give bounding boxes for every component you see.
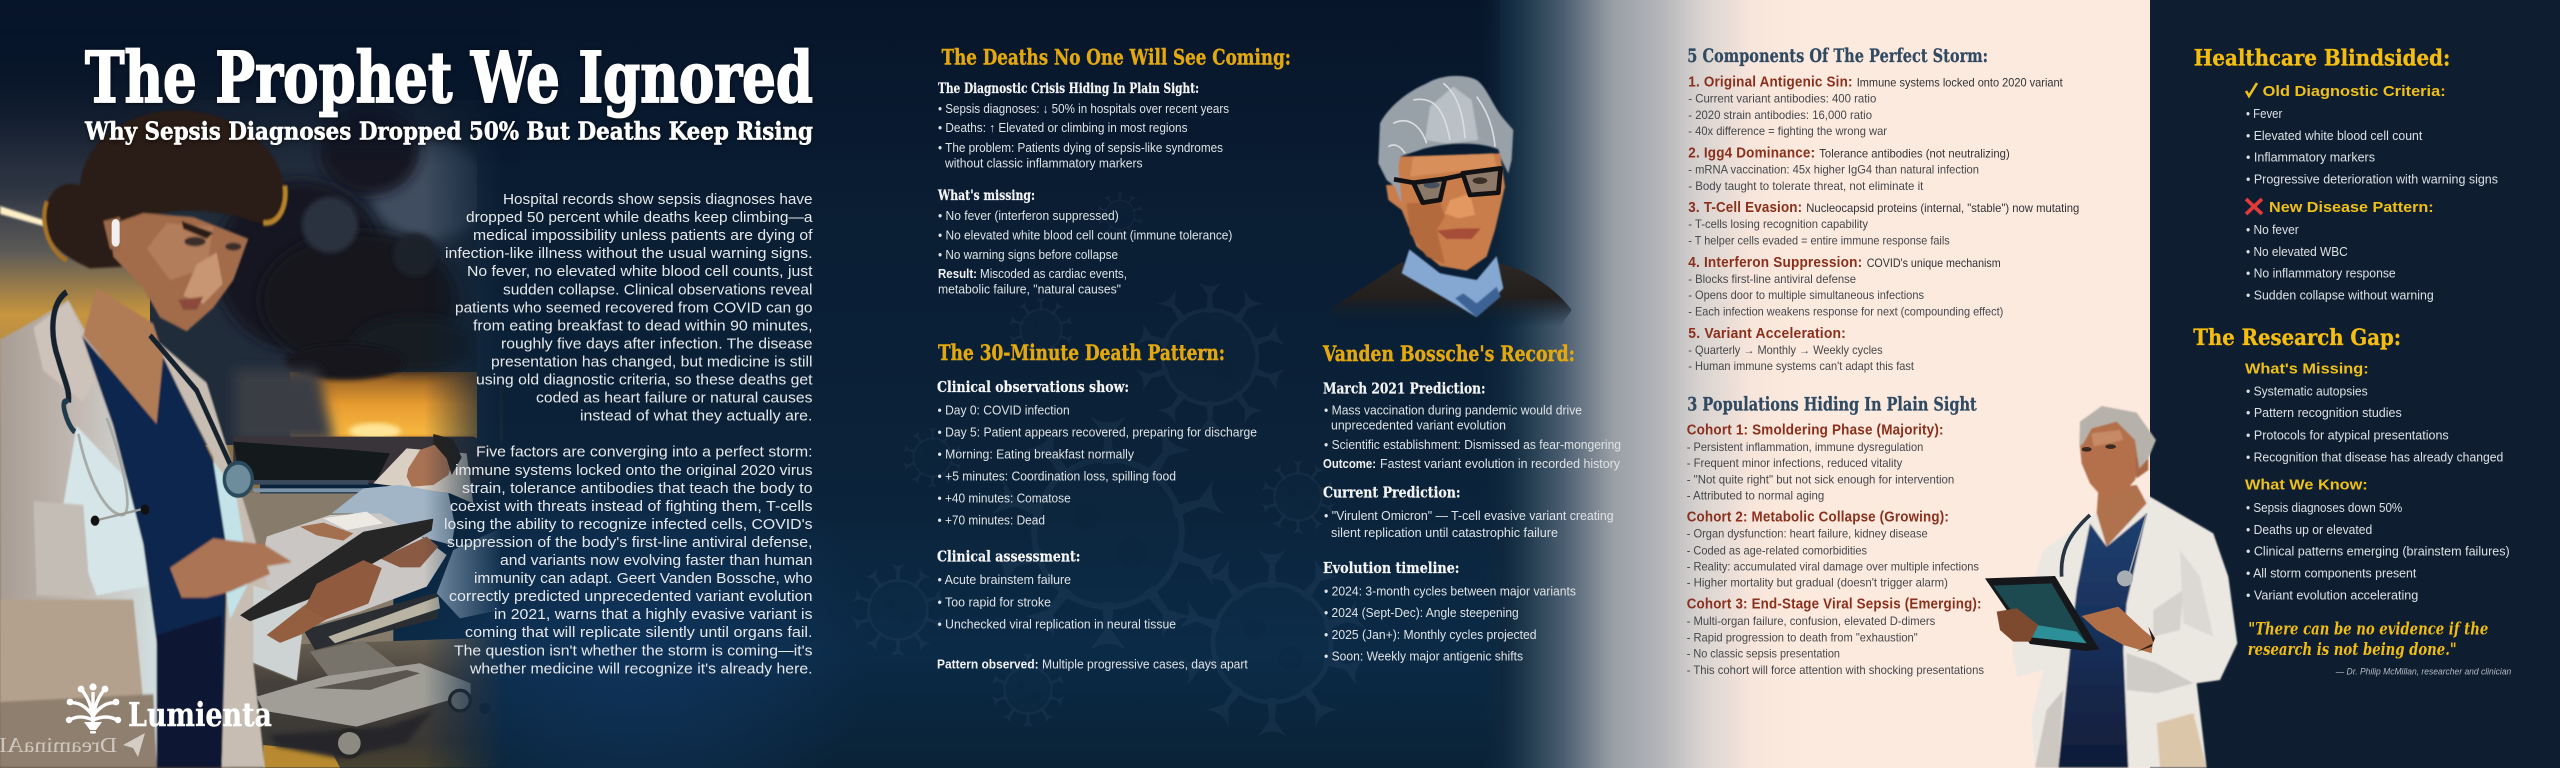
illustration: dark overlay at the top — [0, 0, 520, 165]
panel: the deaths no one will see coming: Result: — [938, 267, 977, 281]
panel: 5 components of the perfect storm: 1. Original Antigenic Sin: — [1688, 75, 1853, 91]
intro paragraph one: dropped 50 percent while deaths keep climbing—a — [466, 209, 813, 226]
panel: 3 populations hiding in plain sight: - This cohort will force attention with shocking presentations — [1687, 664, 1984, 677]
panel: Vanden Bossche's record: • "Virulent Omicron" — T-cell evasive variant creating — [1324, 509, 1614, 523]
panel: the 30-minute death pattern: • Day 0: COVID infection — [938, 403, 1070, 417]
intro paragraph two: and variants now evolving faster than human — [500, 552, 812, 569]
panel: the research gap: • Recognition that disease has already changed — [2246, 450, 2503, 464]
subtitle: Why Sepsis Diagnoses Dropped 50% But Deaths Keep Rising — [84, 117, 813, 146]
panel: 5 components of the perfect storm: - mRNA vaccination: 45x higher IgG4 than natural infection — [1688, 163, 1979, 176]
intro paragraph one: sudden collapse. Clinical observations reveal — [503, 281, 812, 298]
callout: quote: "There can be no evidence if the — [2248, 620, 2488, 639]
panel: the 30-minute death pattern: • Acute brainstem failure — [938, 573, 1071, 587]
panel: 5 components of the perfect storm — [1687, 45, 2079, 373]
panel: Vanden Bossche's record — [1322, 341, 1621, 664]
panel: the deaths no one will see coming: The Diagnostic Crisis Hiding In Plain Sight: — [938, 81, 1199, 97]
panel: the research gap: The Research Gap: — [2193, 325, 2401, 351]
panel: 5 components of the perfect storm: - 40x difference = fighting the wrong war — [1688, 125, 1887, 138]
watermark: mirrored DreaminaAI: DreaminaAI — [0, 733, 117, 757]
panel: the deaths no one will see coming — [937, 45, 1291, 296]
intro paragraph one: roughly five days after infection. The disease — [501, 335, 812, 352]
panel: the 30-minute death pattern — [937, 340, 1257, 672]
intro paragraph one: patients who seemed recovered from COVID can go — [455, 299, 812, 316]
panel: 5 components of the perfect storm: Nucleocapsid proteins (internal, "stable") now mutating — [1806, 201, 2079, 215]
panel: 3 populations hiding in plain sight: - Multi-organ failure, confusion, elevated D-dimers — [1687, 615, 1935, 628]
intro paragraph two: whether medicine will recognize it's already here. — [469, 660, 812, 677]
panel: the 30-minute death pattern: • Morning: Eating breakfast normally — [938, 447, 1135, 461]
panel: 5 components of the perfect storm: - Human immune systems can't adapt this fast — [1688, 360, 1915, 373]
panel: Vanden Bossche's record: • Soon: Weekly major antigenic shifts — [1324, 650, 1523, 664]
panel: the research gap: • Protocols for atypical presentations — [2246, 428, 2449, 442]
intro paragraph two — [444, 444, 812, 677]
panel: the deaths no one will see coming: metabolic failure, "natural causes" — [938, 282, 1121, 296]
decoration: virus particles — [851, 192, 1365, 736]
panel: 3 populations hiding in plain sight: 3 Populations Hiding In Plain Sight — [1687, 393, 1977, 415]
panel: 5 components of the perfect storm: - Blocks first-line antiviral defense — [1688, 273, 1856, 286]
panel: 5 components of the perfect storm: 5 Components Of The Perfect Storm: — [1687, 45, 1988, 67]
panel: healthcare blindsided: • Progressive deterioration with warning signs — [2246, 173, 2498, 187]
panel: Vanden Bossche's record: • 2024: 3-month cycles between major variants — [1324, 584, 1576, 598]
illustration: bed, patient and room lower area — [230, 434, 520, 768]
intro paragraph two: coexist with threats instead of fighting them, T-cells — [450, 498, 812, 515]
panel: 3 populations hiding in plain sight: Cohort 1: Smoldering Phase (Majority): — [1687, 422, 1944, 438]
panel: the research gap: • Pattern recognition studies — [2246, 406, 2402, 420]
intro paragraph one: presentation has changed, but medicine is still — [491, 354, 812, 370]
panel: Vanden Bossche's record: • 2024 (Sept-Dec): Angle steepening — [1324, 606, 1519, 620]
panel: the deaths no one will see coming: • Sepsis diagnoses: ↓ 50% in hospitals over recent years — [938, 102, 1229, 116]
logo: Lumienta: Lumienta — [128, 695, 272, 734]
intro paragraph two: immunity can adapt. Geert Vanden Bossche, who — [474, 570, 812, 587]
panel: 3 populations hiding in plain sight: - No classic sepsis presentation — [1687, 648, 1840, 661]
panel: the 30-minute death pattern: • +40 minutes: Comatose — [938, 491, 1071, 505]
panel: the deaths no one will see coming: • No elevated white blood cell count (immune tolerance) — [938, 228, 1232, 242]
panel: the 30-minute death pattern: Pattern observed: — [937, 658, 1039, 672]
panel: 3 populations hiding in plain sight: - Organ dysfunction: heart failure, kidney disease — [1687, 528, 1928, 541]
intro paragraph one: infection-like illness without the usual warning signs. — [445, 245, 812, 262]
panel: the research gap: What We Know: — [2245, 477, 2368, 494]
panel: 5 components of the perfect storm: - Each infection weakens response for next (compounding effect) — [1688, 305, 2003, 318]
panel: cover illustration room — [0, 60, 520, 768]
panel: the research gap: What's Missing: — [2245, 361, 2369, 378]
intro paragraph two: correctly predicted unprecedented variant evolution — [449, 588, 812, 605]
panel: healthcare blindsided: • No elevated WBC — [2246, 245, 2348, 259]
panel: Vanden Bossche's record: • Scientific establishment: Dismissed as fear-mongering — [1324, 438, 1621, 452]
panel: the deaths no one will see coming: • Deaths: ↑ Elevated or climbing in most regions — [938, 121, 1188, 135]
panel: healthcare blindsided — [2194, 46, 2498, 303]
panel: the deaths no one will see coming: • No fever (interferon suppressed) — [938, 209, 1119, 223]
panel: the 30-minute death pattern: Clinical assessment: — [937, 549, 1080, 566]
illustration: hospital wall — [0, 60, 260, 768]
panel: 3 populations hiding in plain sight: - Rapid progression to death from "exhaustion" — [1687, 632, 1918, 644]
panel: the 30-minute death pattern: The 30-Minute Death Pattern: — [938, 340, 1225, 365]
panel: healthcare blindsided: • Fever — [2246, 107, 2282, 121]
intro paragraph one: coded as heart failure or natural causes — [536, 390, 812, 407]
panel: 5 components of the perfect storm: 5. Variant Acceleration: — [1688, 326, 1846, 342]
panel: Vanden Bossche's record: • Mass vaccination during pandemic would drive — [1324, 403, 1582, 417]
panel: the deaths no one will see coming: • No warning signs before collapse — [938, 248, 1118, 262]
panel: 5 components of the perfect storm: - T-cells losing recognition capability — [1688, 218, 1868, 231]
intro paragraph one: instead of what they actually are. — [580, 408, 812, 425]
intro paragraph two: suppression of the body's first-line antiviral defense, — [447, 534, 812, 551]
panel: Vanden Bossche's record: Fastest variant evolution in recorded history — [1380, 457, 1621, 471]
panel: healthcare blindsided: New Disease Pattern: — [2269, 199, 2434, 216]
panel: healthcare blindsided: • No fever — [2246, 223, 2299, 237]
panel: 5 components of the perfect storm: 3. T-Cell Evasion: — [1688, 200, 1802, 216]
illustration: ceiling light — [0, 206, 50, 228]
panel: Vanden Bossche's record: Evolution timeline: — [1323, 560, 1460, 577]
panel: 5 components of the perfect storm: 2. Igg4 Dominance: — [1688, 146, 1815, 162]
panel: the deaths no one will see coming: What's missing: — [937, 188, 1035, 204]
panel: 3 populations hiding in plain sight: Cohort 2: Metabolic Collapse (Growing): — [1687, 510, 1949, 526]
illustration: storm sky through window — [150, 100, 505, 445]
panel: 5 components of the perfect storm: Immune systems locked onto 2020 variant — [1857, 76, 2063, 90]
panel: 3 populations hiding in plain sight: - Reality: accumulated viral damage over multiple infections — [1687, 560, 1979, 574]
panel: the research gap — [2193, 325, 2510, 602]
panel: Vanden Bossche's record: silent replication until catastrophic failure — [1331, 526, 1558, 540]
panel: the deaths no one will see coming: Miscoded as cardiac events, — [980, 267, 1127, 281]
intro paragraph one: medical impossibility unless patients are dying of — [473, 227, 813, 244]
panel: Vanden Bossche's record: Outcome: — [1323, 457, 1376, 471]
panel: the deaths no one will see coming: • The problem: Patients dying of sepsis-like syndromes — [938, 141, 1223, 155]
title: The Prophet We Ignored — [85, 36, 813, 119]
panel: healthcare blindsided: • Sudden collapse without warning — [2246, 289, 2434, 303]
illustration: portrait of Vanden Bossche — [1330, 76, 1572, 327]
callout: quote: — Dr. Philip McMillan, researcher and clinician — [2335, 666, 2511, 677]
panel: 5 components of the perfect storm: - 2020 strain antibodies: 16,000 ratio — [1688, 109, 1872, 122]
panel: 3 populations hiding in plain sight: - Coded as age-related comorbidities — [1687, 544, 1867, 557]
intro paragraph two: immune systems locked onto the original 2020 virus — [455, 462, 812, 479]
panel: the deaths no one will see coming: without classic inflammatory markers — [944, 156, 1143, 170]
illustration: doctor looking up with tablet — [1985, 406, 2237, 768]
panel: the 30-minute death pattern: • +5 minutes: Coordination loss, spilling food — [938, 469, 1176, 483]
intro paragraph two: coming that will replicate silently until organs fail. — [465, 624, 812, 641]
panel: 5 components of the perfect storm: Tolerance antibodies (not neutralizing) — [1819, 147, 2010, 161]
panel: Vanden Bossche's record: • 2025 (Jan+): Monthly cycles projected — [1324, 628, 1536, 642]
panel: the 30-minute death pattern: Multiple progressive cases, days apart — [1042, 658, 1248, 672]
illustration: doctor with tablet — [0, 110, 433, 767]
intro paragraph two: The question isn't whether the storm is coming—it's — [454, 642, 812, 659]
panel: right dark background — [2150, 0, 2560, 768]
intro paragraph one: using old diagnostic criteria, so these deaths get — [476, 372, 813, 388]
panel: 5 components of the perfect storm: - Quarterly → Monthly → Weekly cycles — [1688, 344, 1883, 357]
panel: 3 populations hiding in plain sight: - Persistent inflammation, immune dysregulation — [1687, 441, 1923, 454]
panel: 5 components of the perfect storm: 4. Interferon Suppression: — [1688, 255, 1862, 271]
panel: the 30-minute death pattern: • Day 5: Patient appears recovered, preparing for discharge — [938, 425, 1257, 439]
panel: the research gap: • Systematic autopsies — [2246, 385, 2368, 399]
panel: the deaths no one will see coming: The Deaths No One Will See Coming: — [942, 45, 1291, 70]
illustration: window frame post — [477, 166, 500, 444]
panel: the 30-minute death pattern: • +70 minutes: Dead — [938, 514, 1045, 528]
panel: the research gap: • Sepsis diagnoses down 50% — [2246, 501, 2402, 515]
panel: healthcare blindsided: • Inflammatory markers — [2246, 151, 2375, 165]
panel: Vanden Bossche's record: Current Prediction: — [1323, 484, 1460, 502]
panel: 5 components of the perfect storm: - T helper cells evaded = entire immune response fails — [1688, 234, 1950, 247]
panel: 3 populations hiding in plain sight: - Higher mortality but gradual (doesn't trigger alarm) — [1687, 577, 1948, 590]
panel: healthcare blindsided: Old Diagnostic Criteria: — [2263, 83, 2446, 100]
panel: healthcare blindsided: • No inflammatory response — [2246, 267, 2396, 281]
logo: Lumienta — [66, 683, 272, 734]
intro paragraph one — [445, 191, 813, 425]
panel: the research gap: • Variant evolution accelerating — [2246, 588, 2418, 602]
intro paragraph two: in 2021, warns that a highly evasive variant is — [494, 606, 812, 623]
panel: Vanden Bossche's record: March 2021 Prediction: — [1323, 381, 1486, 398]
panel: the research gap: • Deaths up or elevated — [2246, 523, 2372, 537]
panel: 3 populations hiding in plain sight: - "Not quite right" but not sick enough for intervention — [1687, 473, 1954, 486]
panel: the research gap: • Clinical patterns emerging (brainstem failures) — [2246, 544, 2510, 558]
panel: healthcare blindsided: • Elevated white blood cell count — [2246, 129, 2423, 143]
panel: the research gap: • All storm components present — [2246, 566, 2417, 580]
panel: 5 components of the perfect storm: COVID's unique mechanism — [1867, 256, 2001, 270]
icon: red cross — [2246, 199, 2262, 214]
panel: 3 populations hiding in plain sight: Cohort 3: End-Stage Viral Sepsis (Emerging): — [1687, 597, 1982, 613]
panel: Vanden Bossche's record: Vanden Bossche's Record: — [1322, 341, 1575, 366]
panel: the 30-minute death pattern: • Unchecked viral replication in neural tissue — [938, 617, 1176, 631]
intro paragraph two: Five factors are converging into a perfect storm: — [476, 444, 812, 461]
panel: 5 components of the perfect storm: - Current variant antibodies: 400 ratio — [1688, 92, 1876, 105]
panel: the 30-minute death pattern: Clinical observations show: — [937, 379, 1129, 396]
panel: Vanden Bossche's record: unprecedented variant evolution — [1331, 418, 1506, 432]
panel: 3 populations hiding in plain sight: - Frequent minor infections, reduced vitality — [1687, 457, 1902, 470]
intro paragraph one: No fever, no elevated white blood cell counts, just — [467, 263, 813, 280]
intro paragraph one: from eating breakfast to dead within 90 minutes, — [473, 317, 812, 334]
panel: healthcare blindsided: Healthcare Blindsided: — [2194, 46, 2450, 72]
icon: check mark — [2246, 83, 2257, 96]
intro paragraph two: strain, tolerance antibodies that teach the body to — [462, 480, 812, 497]
intro paragraph one: Hospital records show sepsis diagnoses have — [503, 191, 812, 208]
panel: 3 populations hiding in plain sight — [1687, 393, 1984, 677]
panel: 5 components of the perfect storm: - Opens door to multiple simultaneous infections — [1688, 289, 1924, 302]
callout: quote: research is not being done." — [2248, 640, 2457, 659]
panel: 5 components of the perfect storm: - Body taught to tolerate threat, not eliminate it — [1688, 180, 1924, 193]
callout: quote — [2248, 620, 2511, 677]
panel: the 30-minute death pattern: • Too rapid for stroke — [938, 595, 1051, 609]
panel: 3 populations hiding in plain sight: - Attributed to normal aging — [1687, 490, 1824, 502]
intro paragraph two: losing the ability to recognize infected cells, COVID's — [444, 516, 812, 533]
